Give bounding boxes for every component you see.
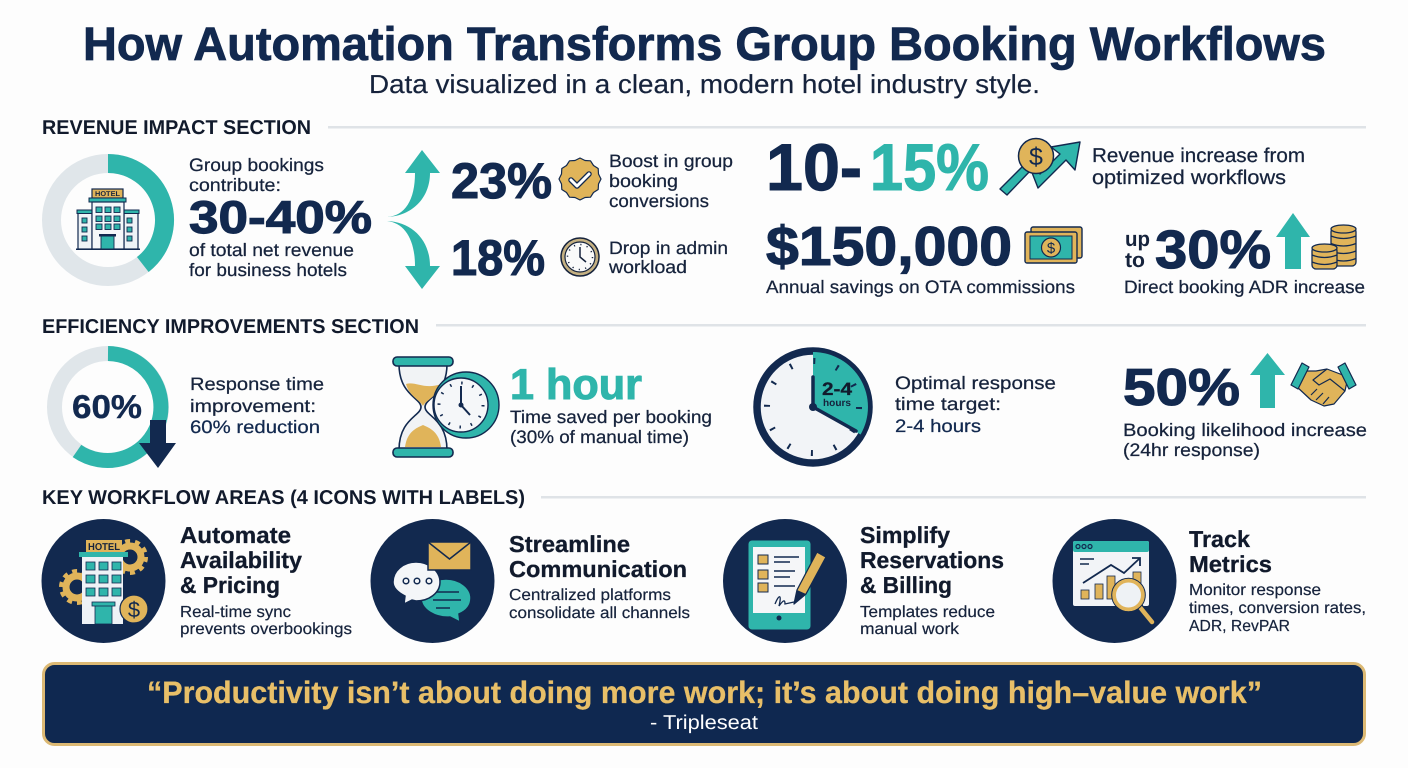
icon: clock with 2-4 hours sector: 2-4	[822, 379, 852, 399]
panel: automate availability and pricing: Real-time sync	[180, 604, 291, 621]
stat: 150,000 dollars OTA savings: $150,000	[766, 215, 1012, 277]
stat: 150,000 dollars OTA savings: Annual savings on OTA commissions	[766, 277, 1075, 297]
icon: banknotes: $	[1047, 240, 1056, 257]
stat: up to 30 percent ADR increase: 30%	[1155, 220, 1271, 280]
icon: teal up arrow	[1276, 213, 1310, 269]
panel: simplify reservations and billing: Simplify	[860, 522, 950, 548]
panel: booking likelihood: (24hr response)	[1123, 440, 1260, 460]
panel: time saved per booking	[393, 357, 712, 457]
panel: optimal response time: time target:	[895, 394, 1001, 414]
panel: automate availability and pricing: & Pricing	[180, 572, 280, 598]
icon: clock with 2-4 hours sector: hours	[823, 398, 851, 409]
icon: down arrow	[139, 420, 176, 468]
panel: time saved per booking: 1 hour	[510, 361, 642, 409]
stat: 18 percent admin workload	[451, 230, 728, 286]
panel: booking likelihood	[1123, 353, 1367, 460]
icon: hotel with gears and coin: HOTEL	[88, 542, 120, 553]
panel: simplify reservations and billing: manual work	[860, 621, 960, 638]
stat: up to 30 percent ADR increase: up	[1125, 228, 1150, 251]
chart: revenue donut	[52, 164, 164, 276]
icon: rising arrow with coin: $	[1029, 143, 1043, 171]
stat: 10-15 percent revenue increase: 15%	[870, 130, 989, 204]
text: group bookings: of total net revenue	[189, 240, 354, 260]
icon: handshake	[1291, 363, 1356, 406]
icon: gold check badge	[559, 158, 601, 200]
panel: track metrics: Track	[1189, 526, 1250, 552]
icon: rising arrow with coin	[1000, 138, 1080, 195]
icon: hotel with gears and coin: $	[128, 597, 140, 622]
panel: automate availability and pricing: prevents overbookings	[180, 621, 352, 638]
panel: optimal response time: Optimal response	[895, 373, 1056, 393]
stat: 23 percent conversions: Boost in group	[609, 151, 733, 171]
callout: quote banner	[44, 664, 1364, 744]
panel: streamline communication: Streamline	[509, 531, 630, 557]
panel: response time improvement: 60% reduction	[190, 417, 320, 437]
panel: track metrics: Metrics	[1189, 551, 1272, 577]
quote text: “Productivity isn’t about doing more work; it’s about doing high–value work”	[147, 675, 1262, 710]
stat: 10-15 percent revenue increase: 10-	[766, 130, 862, 204]
panel: automate availability and pricing: Automate	[180, 522, 291, 548]
stat: 18 percent admin workload: Drop in admin	[609, 238, 728, 258]
title: How Automation Transforms Group Booking Workflows	[83, 17, 1326, 70]
heading: revenue impact section: REVENUE IMPACT SECTION	[42, 117, 311, 139]
panel: streamline communication: Centralized platforms	[509, 587, 671, 604]
stat: 23 percent conversions: booking	[609, 171, 678, 191]
heading: key workflow areas: KEY WORKFLOW AREAS (4 ICONS WITH LABELS)	[42, 487, 525, 509]
panel: track metrics: times, conversion rates,	[1189, 600, 1366, 617]
text: group bookings: for business hotels	[189, 260, 347, 280]
panel: time saved per booking: Time saved per booking	[510, 407, 712, 427]
icon: hotel building	[76, 189, 140, 250]
icon: tablet with checklist and pen	[723, 519, 847, 643]
text: group bookings	[189, 155, 372, 280]
icon: clock with 2-4 hours sector	[757, 351, 869, 463]
panel: streamline communication	[370, 519, 690, 643]
icon: hourglass with clock	[393, 357, 499, 457]
stat: 18 percent admin workload: workload	[608, 257, 687, 277]
stat: 23 percent conversions: conversions	[609, 191, 709, 211]
panel: simplify reservations and billing: Reservations	[860, 547, 1004, 573]
panel: group bookings contribution	[52, 155, 372, 280]
icon: split up and down arrows	[387, 150, 440, 289]
icon: chat bubbles and envelope	[370, 519, 494, 643]
text: group bookings: 30-40%	[189, 191, 372, 243]
panel: automate availability and pricing	[42, 519, 352, 643]
stat: up to 30 percent ADR increase: Direct booking ADR increase	[1124, 277, 1365, 297]
icon: hotel with gears and coin	[42, 519, 166, 643]
panel: streamline communication: Communication	[509, 556, 687, 582]
panel: track metrics: ADR, RevPAR	[1189, 618, 1290, 635]
panel: track metrics: Monitor response	[1189, 582, 1321, 599]
panel: simplify reservations and billing: & Billing	[860, 572, 952, 598]
stat: 10-15 percent revenue increase: Revenue increase from	[1092, 145, 1305, 167]
icon: small clock	[561, 238, 599, 276]
text: group bookings: contribute:	[189, 175, 281, 195]
panel: time saved per booking: (30% of manual time)	[510, 427, 689, 447]
panel: response time improvement: Response time	[190, 374, 324, 394]
icon: dashboard with magnifier	[1052, 519, 1176, 643]
panel: simplify reservations and billing	[723, 519, 1004, 643]
heading: efficiency improvements section: EFFICIENCY IMPROVEMENTS SECTION	[42, 316, 419, 338]
text: group bookings: Group bookings	[189, 155, 324, 175]
panel: booking likelihood: Booking likelihood increase	[1123, 420, 1367, 440]
stat: 10-15 percent revenue increase: optimized workflows	[1092, 167, 1286, 189]
stat: 18 percent admin workload: 18%	[451, 230, 545, 286]
panel: optimal response time	[757, 351, 1056, 463]
panel: booking likelihood: 50%	[1123, 359, 1240, 417]
panel: response time improvement: improvement:	[190, 396, 316, 416]
panel: optimal response time: 2-4 hours	[895, 416, 981, 436]
quote attribution: - Tripleseat	[650, 712, 758, 734]
stat: up to 30 percent ADR increase	[1124, 213, 1365, 297]
chart: 60 percent donut	[54, 354, 162, 460]
stat: 10-15 percent revenue increase	[766, 130, 1305, 204]
subtitle: Data visualized in a clean, modern hotel industry style.	[369, 69, 1040, 99]
panel: streamline communication: consolidate all channels	[509, 605, 690, 622]
panel: response time improvement	[54, 354, 324, 468]
panel: response time improvement: 60%	[72, 388, 142, 425]
panel: automate availability and pricing: Availability	[180, 547, 302, 573]
icon: coin stacks	[1312, 225, 1356, 269]
stat: 150,000 dollars OTA savings	[766, 215, 1082, 297]
icon: teal up arrow	[1250, 353, 1285, 408]
stat: 23 percent conversions	[451, 151, 733, 211]
panel: simplify reservations and billing: Templates reduce	[860, 604, 995, 621]
panel: track metrics	[1052, 519, 1366, 643]
icon: hotel building: HOTEL	[95, 191, 121, 198]
stat: 23 percent conversions: 23%	[451, 153, 552, 209]
icon: banknotes	[1025, 227, 1082, 263]
stat: up to 30 percent ADR increase: to	[1125, 249, 1145, 272]
